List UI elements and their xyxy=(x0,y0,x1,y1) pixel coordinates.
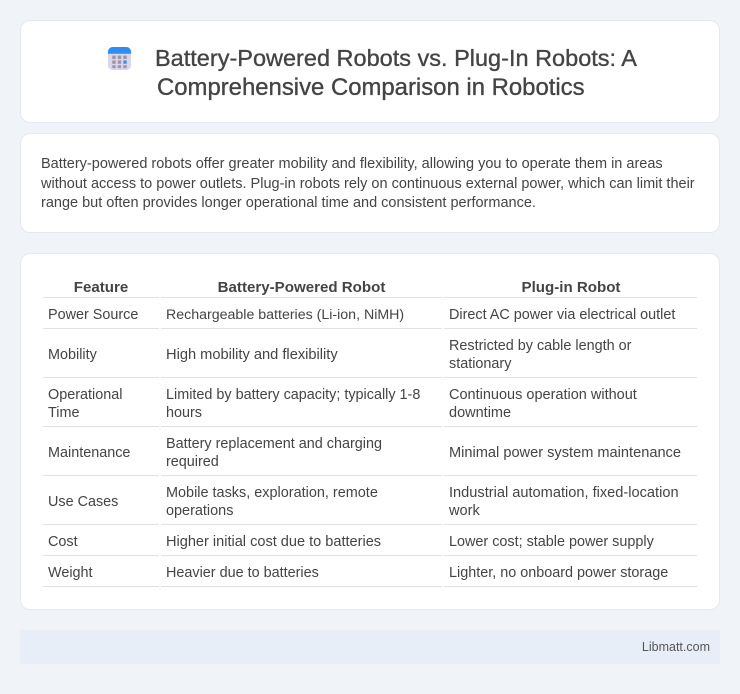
row: weight: Heavier due to batteries xyxy=(166,565,319,581)
row: maintenance xyxy=(48,436,681,470)
row: maintenance: Battery replacement and charging xyxy=(166,436,382,452)
row: mobility: stationary xyxy=(449,356,511,372)
title: Battery-Powered Robots vs. Plug-In Robots: A xyxy=(155,45,637,71)
row: use cases: operations xyxy=(166,503,233,519)
table header: Feature xyxy=(74,279,128,296)
row: maintenance: Minimal power system maintenance xyxy=(449,445,681,461)
row: weight: Weight xyxy=(48,565,93,581)
row: mobility xyxy=(48,338,632,372)
footer bar xyxy=(20,630,720,664)
intro text xyxy=(41,156,695,211)
row: use cases: work xyxy=(449,503,480,519)
row: cost xyxy=(48,534,654,550)
row: power source: Power Source xyxy=(48,307,138,323)
row: power source xyxy=(48,307,676,323)
row: weight: Lighter, no onboard power storage xyxy=(449,565,668,581)
panel: title card xyxy=(20,20,720,123)
icon: calendar grid xyxy=(108,47,132,70)
row: mobility: Restricted by cable length or xyxy=(449,338,631,354)
row: cost: Cost xyxy=(48,534,78,550)
row: operational time: downtime xyxy=(449,405,511,421)
row: operational time: Limited by battery capacity; typically 1-8 xyxy=(166,387,420,403)
intro text: range but often provides longer operational time and consistent performance. xyxy=(41,195,536,211)
row: use cases: Industrial automation, fixed-location xyxy=(449,485,679,501)
row: power source: Direct AC power via electrical outlet xyxy=(449,307,675,323)
title: Comprehensive Comparison in Robotics xyxy=(157,74,585,101)
row: weight xyxy=(48,565,668,581)
row: operational time: Operational xyxy=(48,387,122,403)
row: maintenance: Maintenance xyxy=(48,445,130,461)
intro text: without access to power outlets. Plug-in robots rely on continuous external power, which can limit their xyxy=(41,176,695,192)
table header xyxy=(74,279,620,296)
intro text: Battery-powered robots offer greater mobility and flexibility, allowing you to operate them in areas xyxy=(41,156,663,172)
row: operational time: Time xyxy=(48,405,79,421)
footer text: Libmatt.com xyxy=(642,640,710,654)
title xyxy=(155,45,638,101)
row: cost: Higher initial cost due to batteries xyxy=(166,534,381,550)
row: operational time: hours xyxy=(166,405,202,421)
row: use cases: Mobile tasks, exploration, remote xyxy=(166,485,378,501)
row: operational time xyxy=(48,387,637,421)
row: use cases: Use Cases xyxy=(48,494,118,510)
row: operational time: Continuous operation without xyxy=(449,387,637,403)
row: maintenance: required xyxy=(166,454,219,470)
table header: Plug-in Robot xyxy=(522,279,620,296)
row: mobility: Mobility xyxy=(48,347,97,363)
row: cost: Lower cost; stable power supply xyxy=(449,534,654,550)
row: mobility: High mobility and flexibility xyxy=(166,347,338,363)
table header: Battery-Powered Robot xyxy=(218,279,385,296)
panel: comparison table xyxy=(20,253,720,610)
row: power source: Rechargeable batteries (Li-ion, NiMH) xyxy=(166,307,404,323)
row: use cases xyxy=(48,485,679,519)
panel: introduction xyxy=(20,133,720,233)
